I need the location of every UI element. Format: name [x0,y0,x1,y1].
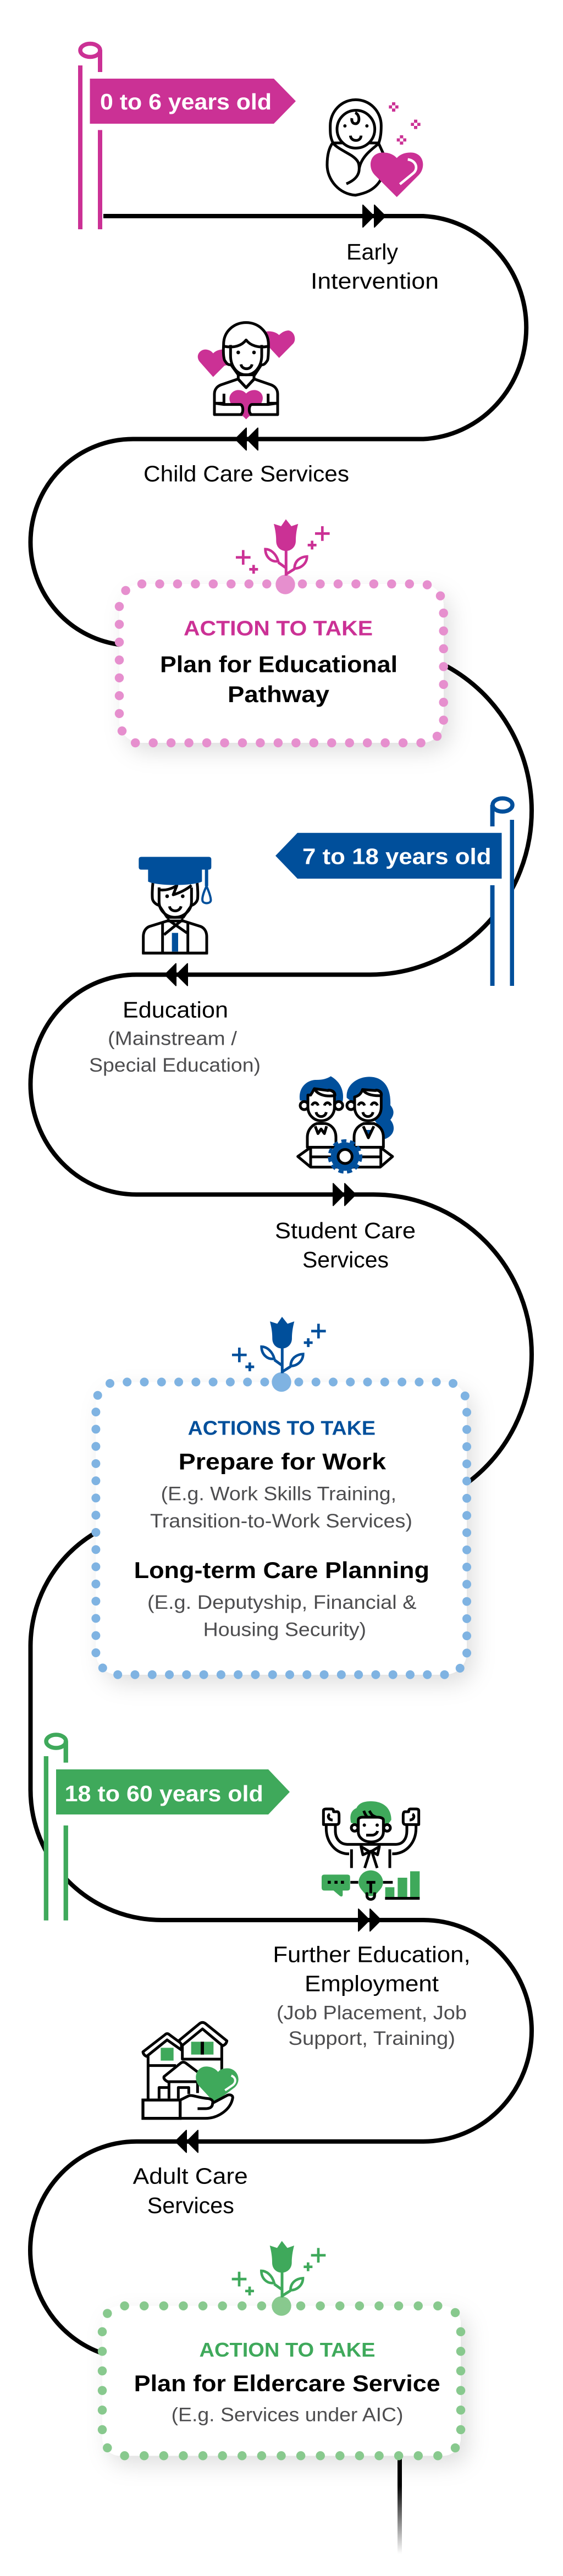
label: early intervention [311,239,439,294]
label: student care services: Services [302,1247,389,1272]
panel text [134,2370,440,2426]
panel heading: ACTION TO TAKE [184,617,373,640]
label: adult care services [133,2163,248,2218]
label: student care services [275,1218,416,1272]
journey path: second section [31,666,532,1483]
label: further education, employment: (Job Placement, Job [277,2003,467,2024]
label: education: (Mainstream / [108,1028,237,1049]
flag: 0 to 6 years old: 0 to 6 years old [100,89,272,114]
action: prepare for work [150,1449,412,1532]
journey path: third section [30,1533,532,2353]
arrow: to early intervention [363,205,385,227]
panel heading: ACTIONS TO TAKE [188,1416,376,1439]
label: adult care services: Services [147,2193,234,2218]
action: long-term care planning: Housing Security) [203,1619,366,1641]
panel text: (E.g. Services under AIC) [172,2404,404,2426]
arrow: to adult care services [175,2130,198,2152]
panel heading: ACTION TO TAKE [199,2338,375,2361]
action: long-term care planning: Long-term Care Planning [134,1557,429,1583]
label: further education, employment: Further Education, [273,1942,471,1967]
icon: students with pencil and gear [298,1076,394,1172]
action: long-term care planning: (E.g. Deputyship, Financial & [147,1592,417,1613]
icon: houses with heart in hand [143,2022,239,2119]
label: early intervention: Early [346,239,398,264]
label: education: Education [123,997,228,1023]
icon: green flower [232,2241,325,2297]
panel: plan for eldercare service [102,2241,461,2456]
flag: 0 to 6 years old [78,44,296,229]
label: education [89,997,261,1076]
label: child care services: Child Care Services [143,461,349,486]
icon: swaddled baby with heart [327,100,423,197]
journey path: fading end [398,2456,402,2555]
icon: employed worker with chat, idea and chart [322,1801,420,1900]
arrow: to education [165,964,187,986]
flag: 18 to 60 years old [44,1735,290,1921]
panel text [160,652,398,707]
icon: carer with hearts [198,323,295,420]
label: student care services: Student Care [275,1218,416,1243]
action: long-term care planning [134,1557,429,1641]
journey path: first section [30,216,526,645]
panel text: Plan for Eldercare Service [134,2370,440,2396]
label: early intervention: Intervention [311,268,439,294]
icon: pink flower [236,519,330,576]
action: prepare for work: Transition-to-Work Services) [150,1510,412,1532]
icon: graduate [139,857,211,953]
label: education: Special Education) [89,1055,261,1076]
label: further education, employment: Employment [305,1971,439,1996]
panel text: Plan for Educational [160,652,398,677]
action: prepare for work: (E.g. Work Skills Training, [161,1483,396,1505]
arrow: to child care services [235,428,258,450]
label: further education, employment [273,1942,471,2049]
label: further education, employment: Support, Training) [288,2028,455,2049]
arrow: to further education [358,1909,381,1931]
arrow: to student care services [333,1183,356,1205]
icon: blue flower [232,1317,326,1374]
flag: 18 to 60 years old: 18 to 60 years old [65,1781,263,1806]
flag: 7 to 18 years old [275,798,514,986]
label: adult care services: Adult Care [133,2163,248,2188]
panel: plan for educational pathway [119,519,444,743]
flag: 7 to 18 years old: 7 to 18 years old [302,844,492,869]
action: prepare for work: Prepare for Work [179,1449,387,1475]
panel: prepare for work and long-term care planning [96,1317,467,1675]
panel text: Pathway [228,681,330,707]
